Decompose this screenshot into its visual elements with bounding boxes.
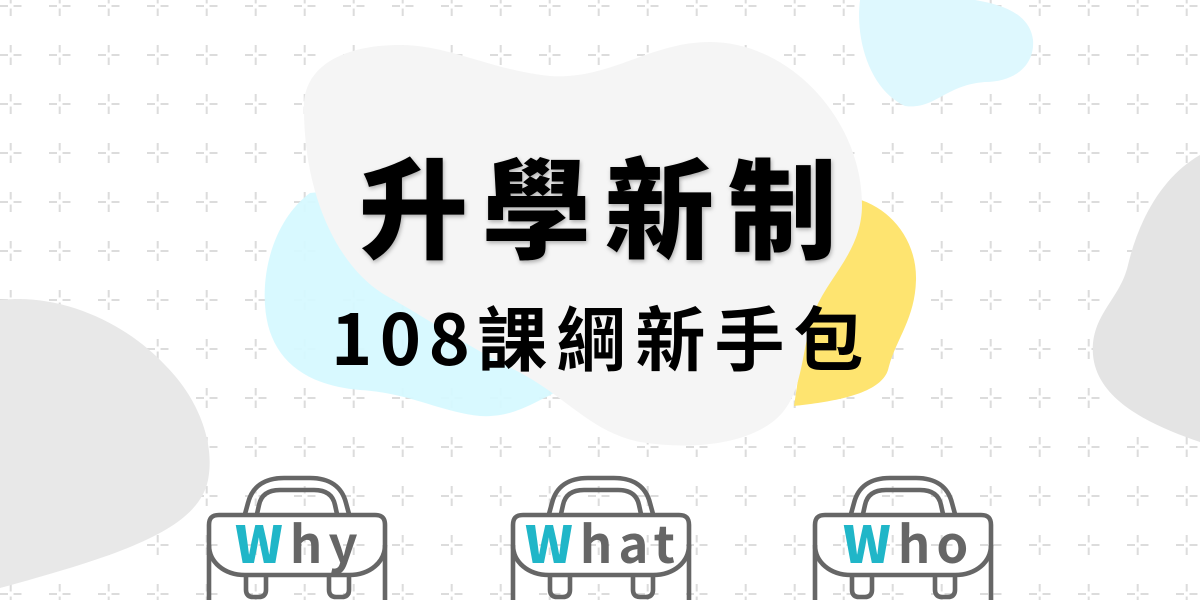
label: Why: Why	[235, 504, 364, 578]
bag: What	[513, 478, 689, 600]
blob: right gray	[1093, 155, 1200, 442]
blob: left gray	[0, 299, 210, 588]
blob: yellow	[794, 197, 916, 406]
blob: center gray	[304, 42, 862, 446]
bag: Who	[815, 478, 991, 600]
bag: Why	[209, 478, 385, 600]
blob: top cyan	[859, 0, 1033, 106]
subtitle: 108課綱新手包	[331, 285, 872, 386]
blob: left cyan	[265, 190, 560, 416]
label: Who: Who	[843, 504, 974, 578]
label: What: What	[525, 504, 681, 578]
title: 升學新制	[359, 125, 851, 282]
